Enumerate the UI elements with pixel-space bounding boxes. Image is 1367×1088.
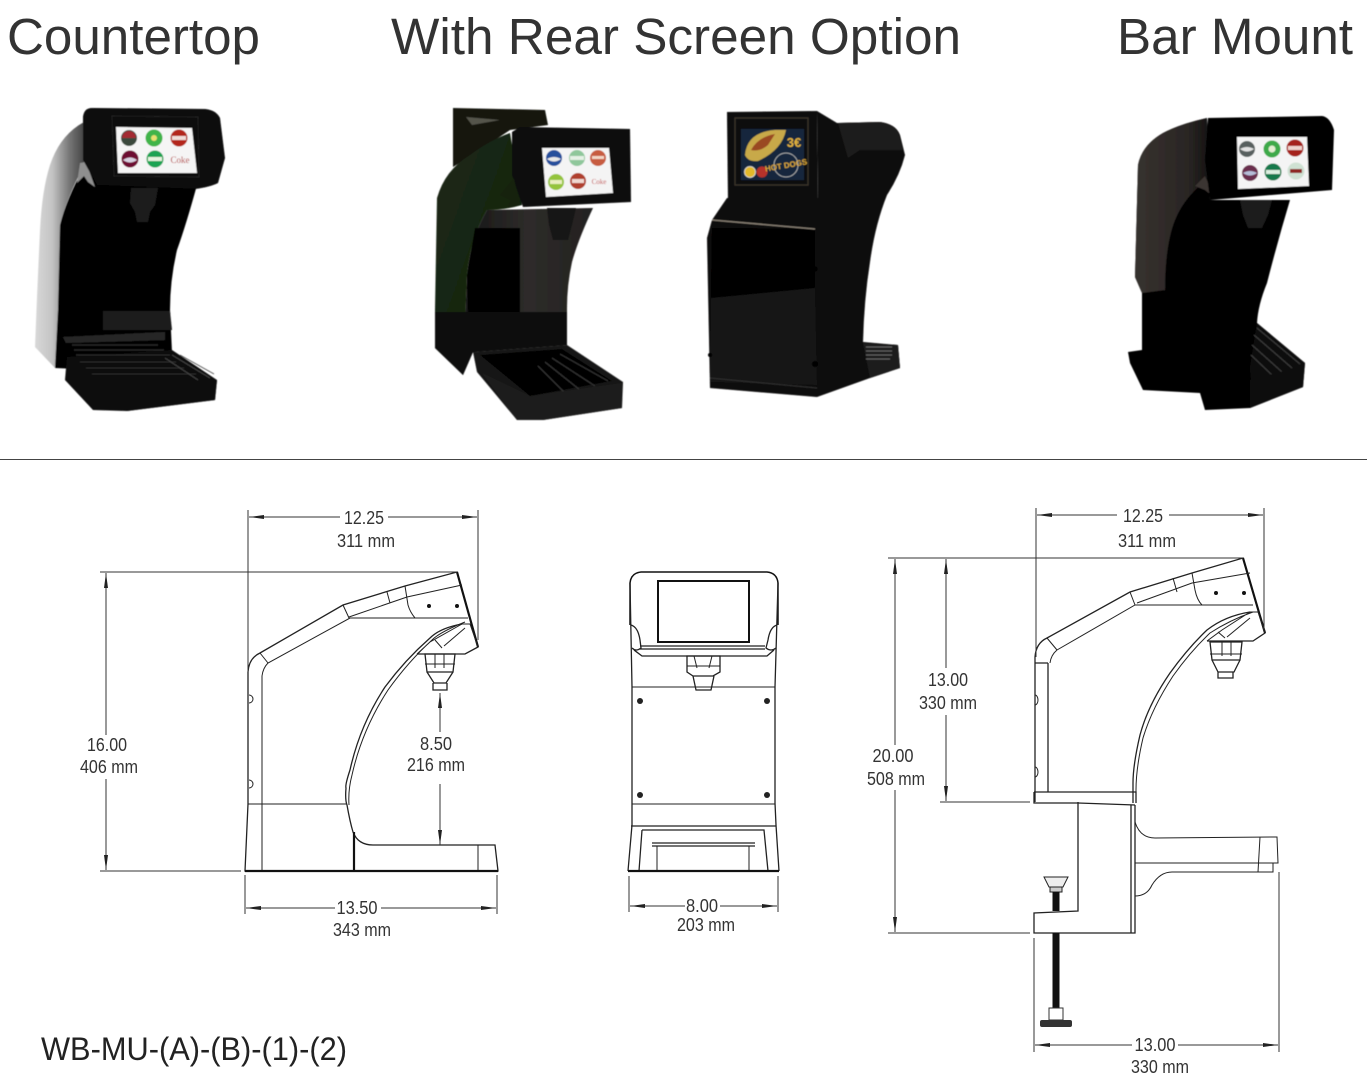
screen housing: [1205, 116, 1334, 200]
photo: countertop dispenser: [35, 108, 225, 411]
dimension: base 13.00 in: [1034, 872, 1279, 1077]
photo: rear screen dispenser, front view: Coke: [592, 178, 606, 186]
screen housing: [512, 127, 631, 207]
dimension: base 13.50 in: 343 mm: [333, 919, 391, 940]
screen housing: [83, 108, 225, 189]
dimension: clearance 8.50 in: [407, 693, 465, 845]
dimension: height 20.00 in: [867, 559, 1030, 933]
dimension: height 13.00 in: [888, 558, 1243, 802]
dimension: width 12.25 in: [248, 507, 478, 672]
nozzle: [1210, 642, 1242, 678]
dimension: clearance 8.50 in: 216 mm: [407, 754, 465, 775]
rear screen: hot dogs advert: [741, 129, 809, 180]
dimension: height 16.00 in: 406 mm: [80, 756, 138, 777]
heading: With Rear Screen Option: With Rear Screen Option: [391, 8, 961, 65]
model code: WB-MU-(A)-(B)-(1)-(2): [41, 1031, 347, 1067]
dimension: clearance 8.50 in: 8.50: [420, 733, 452, 754]
nozzle: [130, 188, 158, 222]
divider: [0, 458, 1367, 460]
dimension: width 12.25 in: 311 mm: [1118, 530, 1176, 551]
nozzle: [425, 654, 455, 690]
dimension: base 13.50 in: [245, 875, 497, 940]
nozzle: [687, 656, 720, 690]
nozzle: [1240, 200, 1272, 228]
photo: rear screen dispenser, front view: [435, 108, 631, 420]
dimension: width 12.25 in: 12.25: [1123, 505, 1163, 526]
heading: Countertop: Countertop: [7, 8, 260, 65]
rear screen: hot dogs advert: HOT DOGS: [764, 157, 809, 174]
dimension: width 8.00 in: 203 mm: [677, 914, 735, 935]
dimension: height 16.00 in: 16.00: [87, 734, 127, 755]
dimension: width 12.25 in: 311 mm: [337, 530, 395, 551]
photo: countertop dispenser: Coke: [170, 155, 190, 165]
dimension: height 13.00 in: 13.00: [928, 669, 968, 690]
dimension: base 13.00 in: 13.00: [1134, 1034, 1176, 1055]
photo: bar mount dispenser: [1128, 116, 1334, 410]
photo: rear screen dispenser, back view: [707, 111, 905, 397]
dimension: base 13.50 in: 13.50: [336, 897, 378, 918]
rear screen housing: [727, 111, 818, 207]
dimension: width 12.25 in: 12.25: [344, 507, 384, 528]
screen: [116, 127, 197, 173]
dimension: height 13.00 in: 330 mm: [919, 692, 977, 713]
drawing: front view: [628, 572, 779, 935]
dimension: height 16.00 in: [80, 572, 457, 871]
heading: Bar Mount: Bar Mount: [1117, 8, 1353, 65]
drawing: bar mount side view: [867, 505, 1279, 1077]
screen: [542, 148, 613, 197]
dimension: height 20.00 in: 508 mm: [867, 768, 925, 789]
clamp bolt: [1040, 877, 1072, 1027]
screen outline: [658, 581, 749, 642]
dimension: width 8.00 in: 8.00: [686, 895, 718, 916]
rear screen: hot dogs advert: 3€: [787, 135, 801, 150]
screen: [1237, 137, 1309, 189]
dimension: height 20.00 in: 20.00: [872, 745, 914, 766]
dimension: width 8.00 in: [629, 876, 778, 935]
dimension: base 13.00 in: 330 mm: [1131, 1056, 1189, 1077]
nozzle: [547, 208, 576, 240]
dimension: width 12.25 in: [1036, 505, 1264, 657]
drawing: countertop side view: [80, 507, 498, 940]
